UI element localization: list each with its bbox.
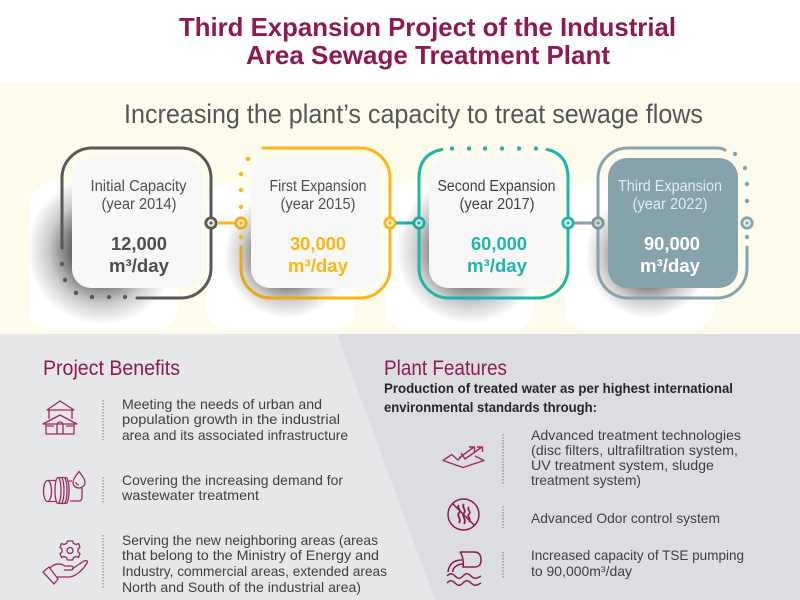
benefit text: neighboring areas: Serving the new neighboring areas (areas bbox=[122, 532, 378, 548]
divider: benefit 3 bbox=[102, 535, 104, 588]
feature text: technologies: Advanced treatment technologies bbox=[531, 427, 741, 443]
benefit text: urban growth: Meeting the needs of urban and bbox=[122, 396, 322, 412]
benefit text: neighboring areas: that belong to the Ministry of Energy and bbox=[122, 547, 379, 563]
benefit text: wastewater demand: wastewater treatment bbox=[121, 487, 259, 503]
icon: no odor bbox=[448, 499, 479, 530]
feature text: technologies: treatment system) bbox=[531, 472, 641, 488]
feature text: technologies bbox=[531, 427, 741, 488]
step: second expansion: 60,000 bbox=[471, 233, 527, 254]
step: second expansion: m³/day bbox=[467, 255, 528, 276]
icon: pipe and drop bbox=[44, 472, 85, 504]
background: benefits panel bbox=[0, 334, 800, 600]
divider: benefit 2 bbox=[102, 477, 104, 503]
title bbox=[179, 12, 676, 70]
connector: first to second bbox=[396, 222, 413, 224]
benefit text: neighboring areas: Industry, commercial areas, extended areas bbox=[122, 563, 387, 579]
divider: benefit 1 bbox=[102, 400, 104, 440]
divider: feature 2 bbox=[502, 506, 504, 528]
step: initial capacity: 12,000 bbox=[111, 233, 167, 254]
step: third expansion: (year 2022) bbox=[632, 196, 708, 213]
step: third expansion bbox=[585, 148, 752, 318]
step: first expansion: First Expansion bbox=[270, 178, 366, 195]
feature text: technologies: (disc filters, ultrafiltration system, bbox=[531, 442, 738, 458]
step: second expansion bbox=[396, 146, 573, 324]
benefit text: urban growth: population growth in the industrial bbox=[122, 411, 340, 427]
step: first expansion: 30,000 bbox=[290, 233, 346, 254]
title: Third Expansion Project of the Industrial bbox=[179, 12, 676, 42]
feature text: TSE pumping: to 90,000m³/day bbox=[531, 563, 632, 579]
subtitle: Increasing the plant’s capacity to treat sewage flows bbox=[124, 99, 703, 129]
benefit text: neighboring areas bbox=[122, 532, 387, 595]
feature text: TSE pumping: Increased capacity of TSE pumping bbox=[531, 547, 744, 563]
step: initial capacity: m³/day bbox=[109, 255, 170, 276]
step: first expansion: (year 2015) bbox=[280, 196, 356, 213]
divider: feature 3 bbox=[502, 552, 504, 578]
background: cream band bbox=[0, 82, 800, 334]
step: third expansion: 90,000 bbox=[644, 233, 700, 254]
connector: second to third bbox=[574, 222, 592, 224]
step: first expansion bbox=[224, 148, 395, 318]
connector: initial to first bbox=[217, 222, 235, 224]
divider: feature 1 bbox=[502, 434, 504, 485]
white backing tiles bbox=[29, 183, 713, 331]
step: initial capacity: (year 2014) bbox=[102, 196, 176, 213]
feature text: TSE pumping bbox=[531, 547, 744, 579]
step: initial capacity: Initial Capacity bbox=[90, 178, 187, 195]
background: features panel bbox=[337, 334, 800, 600]
benefit text: wastewater demand bbox=[121, 472, 343, 503]
benefit text: neighboring areas: North and South of the industrial area) bbox=[122, 579, 361, 595]
title: Area Sewage Treatment Plant bbox=[246, 40, 610, 70]
heading: project benefits: Project Benefits bbox=[43, 357, 180, 380]
step: second expansion: (year 2017) bbox=[460, 196, 534, 213]
features intro: Production of treated water as per highest international bbox=[384, 380, 733, 396]
icon: treatment technologies bbox=[443, 447, 484, 468]
heading: plant features: Plant Features bbox=[384, 357, 507, 380]
step: third expansion: m³/day bbox=[640, 255, 701, 276]
benefit text: urban growth bbox=[122, 396, 348, 443]
step: third expansion: Third Expansion bbox=[618, 178, 722, 195]
step: initial capacity bbox=[27, 148, 216, 325]
feature text: technologies: UV treatment system, sludge bbox=[531, 457, 714, 473]
benefit text: wastewater demand: Covering the increasing demand for bbox=[122, 472, 343, 488]
icon: houses bbox=[43, 401, 77, 434]
step: first expansion: m³/day bbox=[288, 255, 349, 276]
feature text: odor control: Advanced Odor control system bbox=[531, 510, 720, 526]
features intro bbox=[384, 380, 733, 415]
icon: TSE pumping bbox=[447, 552, 481, 585]
benefit text: urban growth: area and its associated infrastructure bbox=[122, 427, 348, 443]
features intro: environmental standards through: bbox=[384, 399, 597, 415]
icon: hand and gear bbox=[43, 541, 87, 584]
step: second expansion: Second Expansion bbox=[438, 178, 556, 195]
